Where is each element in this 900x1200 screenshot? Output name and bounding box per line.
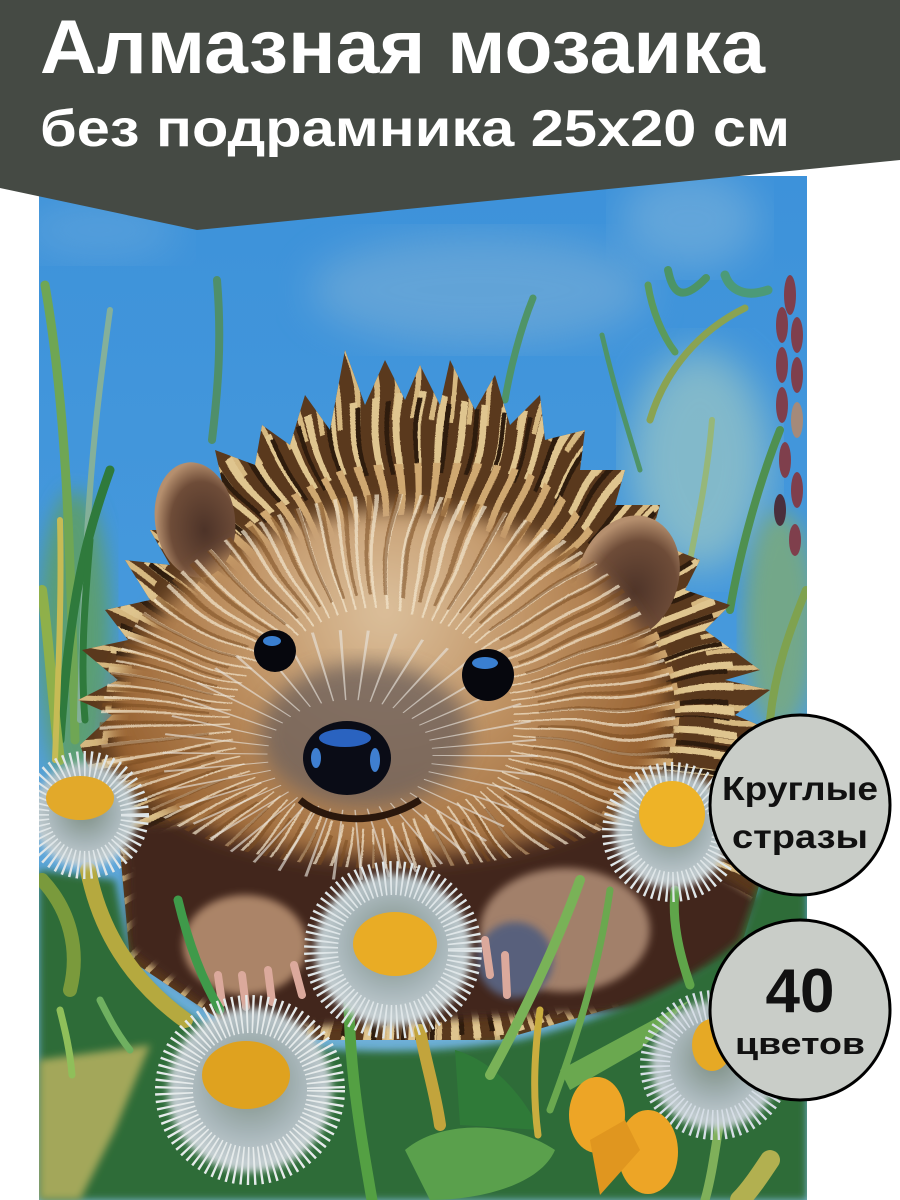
hedgehog: [78, 350, 770, 1040]
badge: 40 colours: 40: [766, 957, 834, 1026]
muzzle: [260, 663, 470, 807]
yellow flower: [569, 1077, 678, 1195]
paw left: [183, 895, 307, 1007]
dandelion center: [315, 874, 471, 1026]
foreground grass: [39, 870, 807, 1200]
spine mass: [78, 350, 770, 1040]
face fur strokes: [125, 535, 625, 905]
badge: round rhinestones: [710, 715, 890, 895]
muzzle fur: [215, 665, 485, 845]
badge: 40 colours: цветов: [735, 1026, 865, 1061]
dandelion bottom right: [651, 1001, 779, 1129]
title: Алмазная мозаика: [40, 5, 766, 90]
ear left: [154, 462, 236, 578]
lower body dark: [125, 821, 760, 1030]
badge: round rhinestones: Круглые: [722, 770, 878, 807]
paw right: [477, 868, 650, 998]
nose: [303, 721, 391, 795]
chin: [300, 800, 420, 819]
badge: round rhinestones: стразы: [732, 818, 868, 855]
eye right: [462, 649, 514, 701]
sky background: [20, 170, 816, 1200]
eye left: [254, 630, 296, 672]
subtitle: без подрамника 25х20 см: [40, 100, 790, 158]
dandelion right: [614, 772, 730, 888]
ear right: [577, 516, 680, 634]
header banner: [0, 0, 900, 230]
background grass: [42, 270, 806, 760]
badge: 40 colours: [710, 920, 890, 1100]
wheat stalk: [774, 275, 803, 556]
dandelion left edge: [33, 763, 137, 867]
painting: hedgehog in dandelions: [20, 170, 816, 1200]
dandelion bottom left: [168, 1008, 332, 1172]
face: [109, 509, 665, 858]
